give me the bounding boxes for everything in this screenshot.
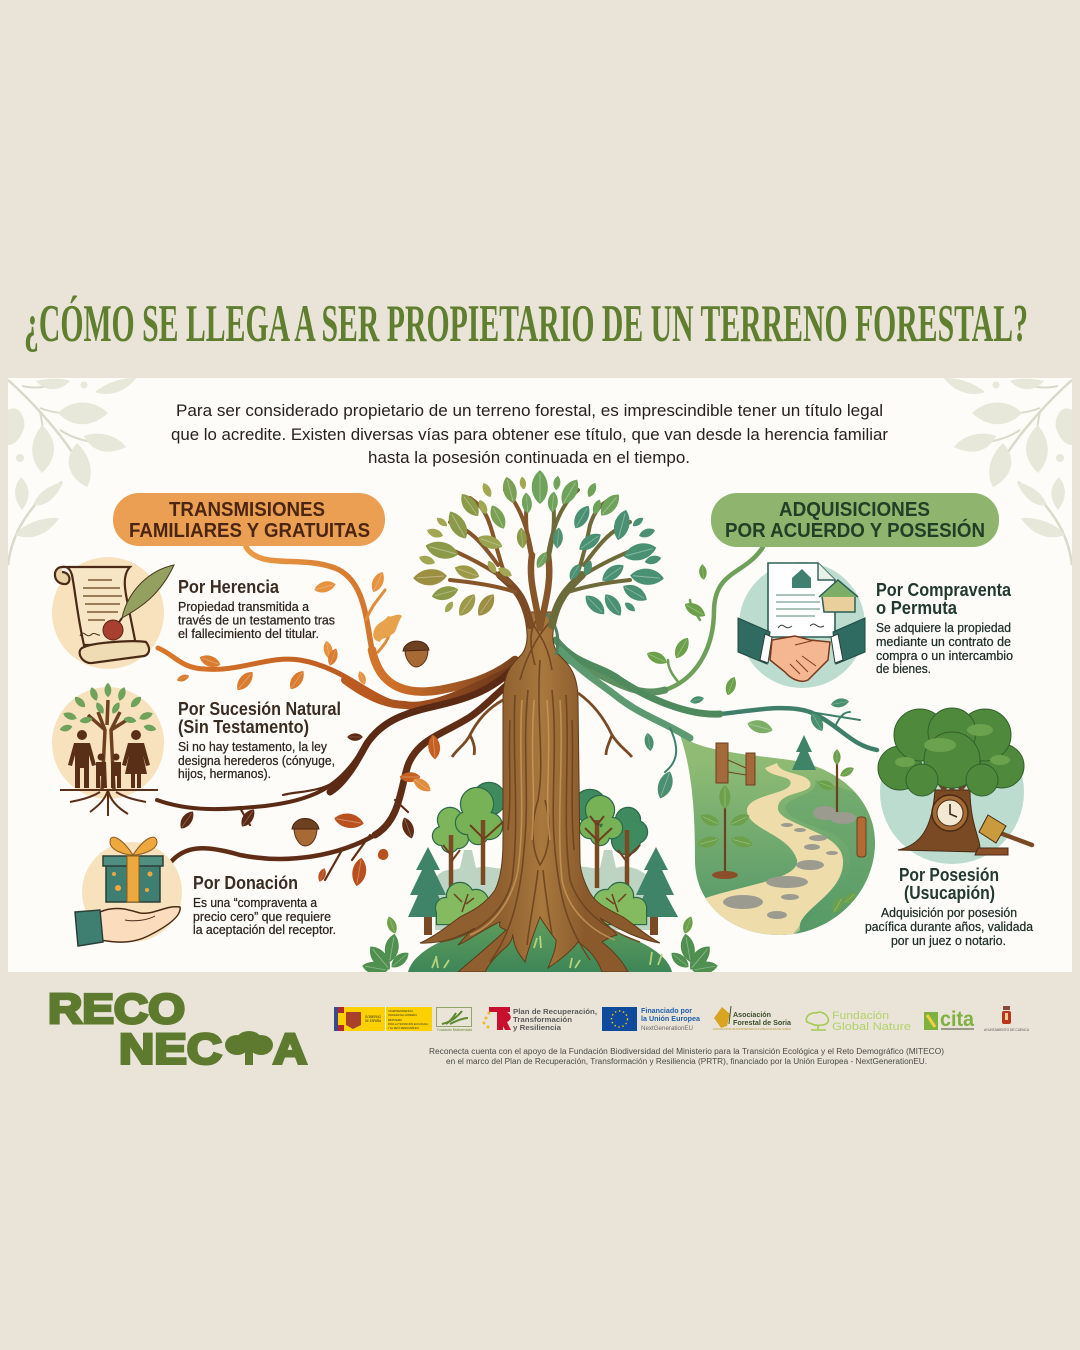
logo: Reconecta: RECO <box>48 985 185 1032</box>
landscape: path and saplings <box>680 735 880 942</box>
footer credit text: Reconecta cuenta con el apoyo de la Fundación Biodiversidad del Ministerio para la Transición Ecológica y el Reto Demográfico (MITECO) <box>429 1047 944 1056</box>
pill heading: Transmisiones <box>113 493 385 546</box>
text: Por Posesión <box>865 865 1033 948</box>
text: Por Sucesión Natural: (Sin Testamento) <box>178 717 309 737</box>
logo: Asociación Forestal de Soria: Forestal de Soria <box>733 1018 792 1027</box>
branch: orange lower <box>158 647 515 706</box>
text: Por Posesión: Adquisición por posesión <box>881 906 1017 920</box>
icon: oak with clock and gavel <box>878 708 1032 864</box>
text: Por Donación: la aceptación del receptor. <box>193 923 336 937</box>
pill heading: Transmisiones: TRANSMISIONES <box>169 498 325 521</box>
text: Por Sucesión Natural: hijos, hermanos). <box>178 767 271 781</box>
text: Por Sucesión Natural: Si no hay testamento, la ley <box>178 740 328 754</box>
logo: Fundación Biodiversidad: Fundación Biodiversidad <box>437 1028 472 1032</box>
logo: Gobierno de España <box>334 1007 432 1031</box>
illustration: tree crown branches <box>440 490 640 628</box>
logo: Asociación Forestal de Soria: Asociación <box>733 1010 771 1019</box>
logo: Ayuntamiento de Cuenca: AYUNTAMIENTO DE CUENCA <box>984 1028 1030 1032</box>
pill heading: Transmisiones: FAMILIARES Y GRATUITAS <box>129 519 370 542</box>
illustration: foreground plants <box>362 916 718 972</box>
text: Por Compraventa <box>876 580 1013 676</box>
text: Por Herencia: el fallecimiento del titular. <box>178 627 319 641</box>
logo: Fundación Global Nature <box>806 1010 911 1033</box>
intro text: Para ser considerado propietario de un terreno forestal, es imprescindible tener un título legal <box>176 402 883 420</box>
text: Por Compraventa: compra o un intercambio <box>876 649 1013 663</box>
text: Por Compraventa: Se adquiere la propiedad <box>876 621 1011 635</box>
footer credit text <box>429 1047 944 1066</box>
illustration: tree crown leaves <box>413 470 665 619</box>
branch: dark brown lower <box>170 678 515 887</box>
text: Por Donación: Por Donación <box>193 873 298 893</box>
branch: teal long <box>556 640 877 801</box>
text: Por Donación: precio cero” que requiere <box>193 910 331 924</box>
logo: Plan de Recuperación: Plan de Recuperación, <box>513 1007 597 1016</box>
text: Por Compraventa: de bienes. <box>876 662 931 676</box>
icon: acorn lower <box>292 818 319 846</box>
infographic canvas <box>8 296 1072 1066</box>
logo: Reconecta: A <box>273 1026 307 1074</box>
logo: CITA <box>924 1008 974 1031</box>
logo: Fundación Biodiversidad <box>436 1008 472 1032</box>
icon: scroll and quill <box>52 557 174 669</box>
logo: Gobierno de España: DE ESPAÑA <box>365 1018 382 1023</box>
logo: Plan de Recuperación: Transformación <box>513 1015 572 1024</box>
logo: CITA: cita <box>940 1008 974 1031</box>
icon: logo tree <box>225 1031 273 1065</box>
text: Por Posesión: (Usucapión) <box>904 883 995 903</box>
text: Por Herencia: través de un testamento tras <box>178 614 335 628</box>
logo: Gobierno de España: MINISTERIO <box>388 1018 403 1022</box>
logo: Gobierno de España: Y EL RETO DEMOGRÁFICO <box>388 1026 420 1030</box>
text: Por Compraventa: o Permuta <box>876 598 958 618</box>
text: Por Compraventa: Por Compraventa <box>876 580 1012 600</box>
illustration: background forest <box>408 783 678 935</box>
logo: Ayuntamiento de Cuenca <box>984 1006 1030 1032</box>
logo: Reconecta <box>48 985 307 1074</box>
text: Por Sucesión Natural: Por Sucesión Natural <box>178 699 341 719</box>
pill heading: Adquisiciones <box>711 493 999 547</box>
text: Por Donación <box>193 873 336 937</box>
logo: Asociación Forestal de Soria: ASOCIACIÓN DE PROPIETARIOS FORESTALES DE SORIA <box>713 1026 791 1031</box>
text: Por Posesión: pacífica durante años, validada <box>865 920 1033 934</box>
icon: contract and handshake <box>738 562 865 688</box>
branch: green upper to Adquisiciones pill <box>555 547 763 697</box>
icon: family and tree <box>52 683 164 816</box>
decoration: right corner foliage <box>944 378 1072 565</box>
logo: Gobierno de España: TERCERA DEL GOBIERNO <box>388 1013 418 1017</box>
text: Por Herencia: Propiedad transmitida a <box>178 600 309 614</box>
intro text: hasta la posesión continuada en el tiempo. <box>368 449 690 467</box>
logo: Reconecta: NEC <box>119 1026 222 1074</box>
logo: Unión Europea <box>602 1007 700 1032</box>
decoration: left corner foliage <box>8 378 136 565</box>
logo: Unión Europea: Financiado por <box>641 1008 692 1015</box>
logo: Gobierno de España: VICEPRESIDENCIA <box>388 1009 413 1013</box>
logo: Plan de Recuperación: y Resiliencia <box>513 1023 562 1032</box>
text: Por Sucesión Natural <box>178 699 341 781</box>
logo: Gobierno de España: GOBIERNO <box>365 1015 381 1019</box>
pill heading: Adquisiciones: ADQUISICIONES <box>779 498 930 521</box>
logo: Unión Europea: la Unión Europea <box>641 1016 700 1023</box>
pill heading: Adquisiciones: POR ACUERDO Y POSESIÓN <box>725 518 985 542</box>
logo: Unión Europea: NextGenerationEU <box>641 1025 693 1032</box>
text: Por Donación: Es una “compraventa a <box>193 896 317 910</box>
branch: orange upper to Transmisiones pill <box>246 547 515 692</box>
icon: acorn upper <box>403 641 429 667</box>
logo: Fundación Global Nature: Fundación <box>832 1010 889 1022</box>
panel: infographic card <box>8 378 1072 977</box>
logo: Plan de Recuperación <box>482 1007 597 1032</box>
text: Por Herencia <box>178 577 335 641</box>
logo: Fundación Global Nature: Global Nature <box>832 1021 911 1033</box>
text: Por Compraventa: mediante un contrato de <box>876 635 1011 649</box>
icon: gift on hand <box>75 837 182 946</box>
logo: Gobierno de España: PARA LA TRANSICIÓN ECOLÓGICA <box>388 1021 428 1026</box>
illustration: ground hill <box>408 917 672 972</box>
logo: Asociación Forestal de Soria <box>713 1006 792 1031</box>
illustration: tree trunk <box>420 612 660 972</box>
text: Por Posesión: por un juez o notario. <box>891 934 1006 948</box>
text: Por Herencia: Por Herencia <box>178 577 280 597</box>
footer credit text: en el marco del Plan de Recuperación, Transformación y Resiliencia (PRTR), financiado por la Unión Europea - NextGenerationEU. <box>446 1057 927 1066</box>
text: Por Sucesión Natural: designa herederos (cónyuge, <box>178 754 335 768</box>
intro text <box>171 402 889 467</box>
branch: dark brown upper <box>157 672 510 831</box>
text: Por Posesión: Por Posesión <box>899 865 999 885</box>
intro text: que lo acredite. Existen diversas vías para obtener ese título, que van desde la herencia familiar <box>171 426 889 444</box>
